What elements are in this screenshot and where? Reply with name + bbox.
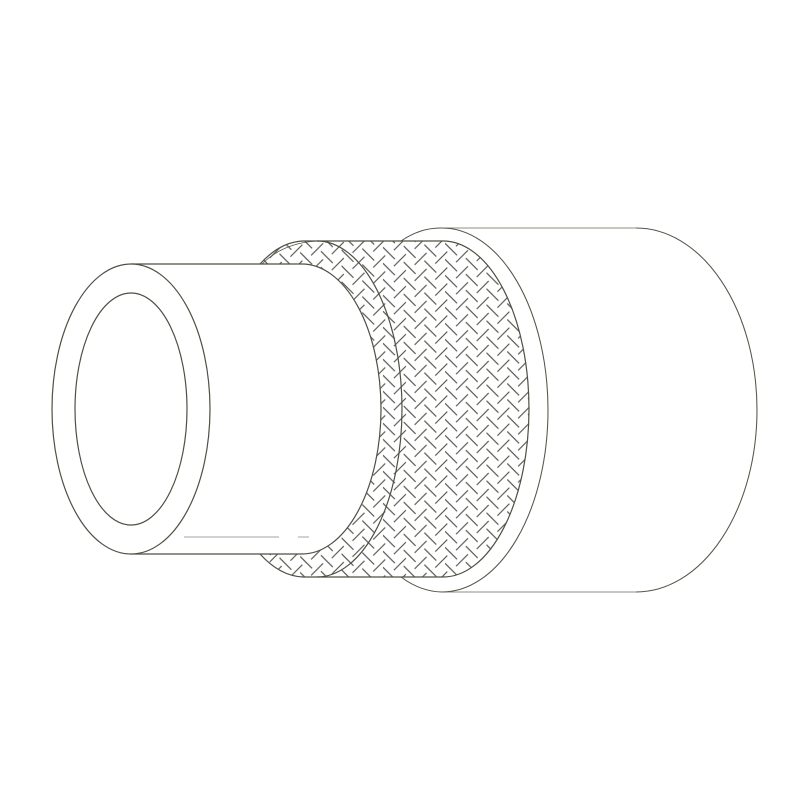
tube opening — [75, 293, 187, 525]
jacket front rim — [401, 228, 548, 592]
tube end ring — [52, 264, 210, 554]
inner tube body — [131, 264, 381, 554]
braid step edge — [317, 241, 402, 577]
braided layer — [260, 241, 529, 577]
highlight lines — [184, 536, 309, 538]
outer jacket — [401, 228, 757, 592]
braid inner arc — [262, 241, 317, 264]
